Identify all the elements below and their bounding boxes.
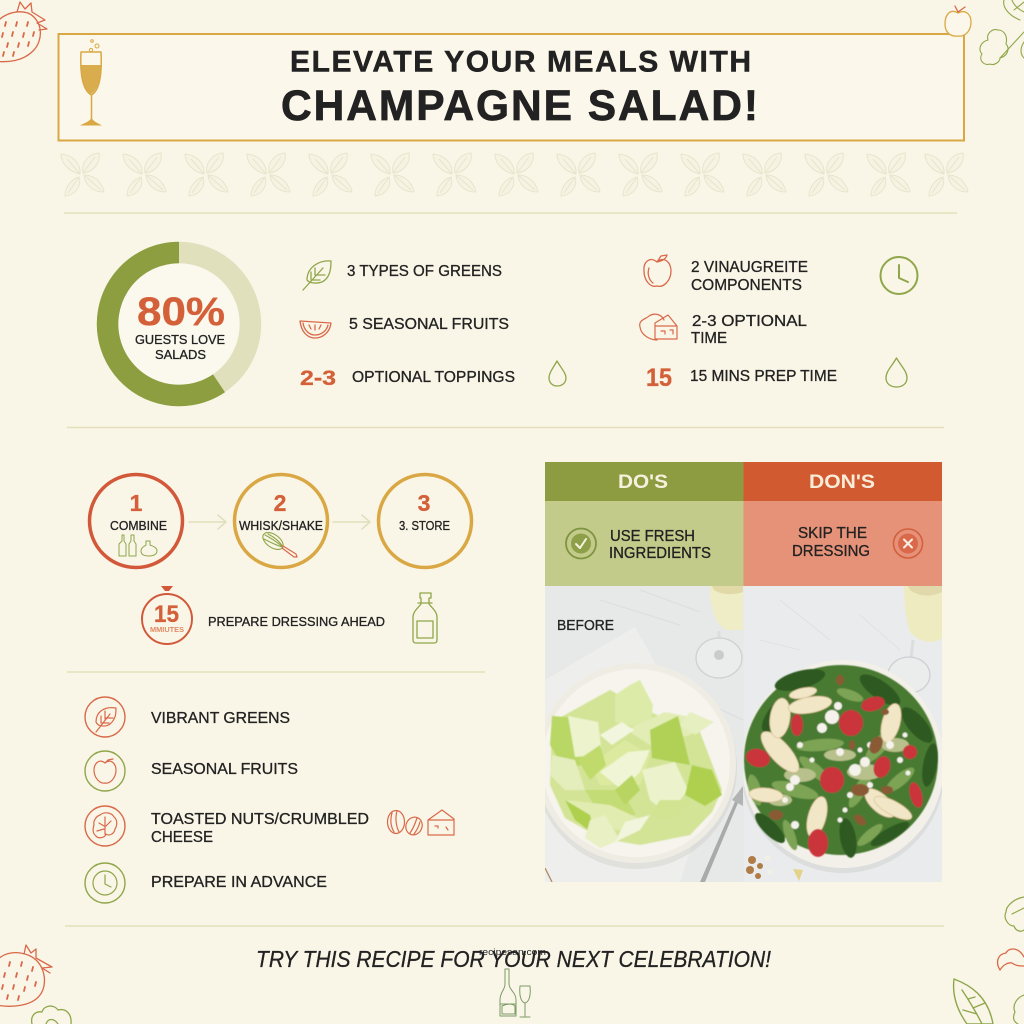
icon: champagne bottle and glass xyxy=(500,969,530,1017)
item: vibrant greens: VIBRANT GREENS xyxy=(151,710,290,727)
step 1: combine: 1 xyxy=(130,490,143,516)
donut caption xyxy=(135,332,225,362)
item: toasted nuts / crumbled cheese xyxy=(85,806,454,846)
step 1: combine xyxy=(90,474,182,568)
icon: herb top right xyxy=(980,0,1024,65)
watermark: recipesan.com xyxy=(479,947,546,958)
panel: don'ts xyxy=(744,462,942,586)
fact: 15 mins prep time: 15 xyxy=(646,364,672,392)
step 3: store: 3. STORE xyxy=(399,519,450,533)
fact: optional time: 2-3 OPTIONAL xyxy=(692,313,807,330)
icon: herb right edge xyxy=(1005,897,1024,931)
item: toasted nuts / crumbled cheese: CHEESE xyxy=(151,829,213,846)
panel: don'ts: DON'S xyxy=(809,472,875,493)
icon: check xyxy=(566,528,596,558)
fact: vinaigrette components: COMPONENTS xyxy=(691,277,802,294)
panel: do's: USE FRESH xyxy=(610,528,695,545)
panel: don'ts: SKIP THE xyxy=(798,525,867,542)
panel: do's: DO'S xyxy=(618,472,668,493)
heading line 1: ELEVATE YOUR MEALS WITH xyxy=(290,46,751,78)
step 2: whisk/shake: WHISK/SHAKE xyxy=(239,519,323,533)
donut caption: SALADS xyxy=(155,347,206,362)
step 3: store: 3 xyxy=(418,490,430,516)
fact: 3 types of greens xyxy=(303,261,502,290)
heading line 2: CHAMPAGNE SALAD! xyxy=(281,83,758,130)
photo: plain lettuce bowl (before) xyxy=(535,586,744,882)
fact: optional toppings: 2-3 xyxy=(300,367,336,390)
timer: 15 minutes xyxy=(142,586,192,644)
donut caption: GUESTS LOVE xyxy=(135,332,225,347)
process steps xyxy=(90,474,472,568)
icons: nuts and cheese xyxy=(388,810,454,838)
photo: dressed champagne salad (after) xyxy=(741,586,945,882)
fact: 15 mins prep time: 15 MINS PREP TIME xyxy=(690,368,837,385)
fact: optional toppings: OPTIONAL TOPPINGS xyxy=(352,369,515,386)
fact: 3 types of greens: 3 TYPES OF GREENS xyxy=(347,263,502,280)
fact: vinaigrette components: 2 VINAUGREITE xyxy=(691,259,808,276)
timer: 15 minutes: MMIUTES xyxy=(150,625,184,634)
checklist xyxy=(85,697,454,903)
panel: don'ts: DRESSING xyxy=(792,543,870,560)
icon: leaf bottom right xyxy=(954,979,993,1024)
panel: do's xyxy=(545,462,744,586)
icon: champagne flute xyxy=(80,40,102,126)
icon: strawberry bottom left xyxy=(0,945,52,1006)
item: vibrant greens xyxy=(85,697,290,737)
fact: optional toppings xyxy=(300,361,566,390)
fact: optional time: TIME xyxy=(691,330,727,347)
icon: nut right edge xyxy=(998,949,1024,970)
fact: 5 seasonal fruits: 5 SEASONAL FRUITS xyxy=(349,316,509,333)
arrow xyxy=(333,515,370,529)
leaf pattern band xyxy=(61,153,968,196)
step 2: whisk/shake xyxy=(234,474,328,568)
fact: 5 seasonal fruits xyxy=(300,316,509,338)
icon: apple top right xyxy=(945,6,971,36)
panel: do's: INGREDIENTS xyxy=(609,545,711,562)
title frame xyxy=(58,34,964,140)
photo label: before: BEFORE xyxy=(557,618,614,634)
arrow xyxy=(189,515,226,529)
fact: optional time xyxy=(640,313,807,347)
icon: drop xyxy=(886,358,907,387)
item: seasonal fruits: SEASONAL FRUITS xyxy=(151,761,298,778)
icon: clock xyxy=(880,257,918,294)
step 3: store xyxy=(378,474,472,568)
timer: 15 minutes: 15 xyxy=(154,601,179,628)
icon: strawberry top left xyxy=(0,2,47,62)
icon: drop xyxy=(549,361,566,386)
icon: herb bottom left xyxy=(32,1006,71,1024)
item: seasonal fruits xyxy=(85,751,298,791)
item: toasted nuts / crumbled cheese: TOASTED NUTS/CRUMBLED xyxy=(151,811,369,828)
closing line: TRY THIS RECIPE FOR YOUR NEXT CELEBRATION! xyxy=(256,946,772,972)
icon: herb bottom right xyxy=(1014,995,1024,1024)
step 1: combine: COMBINE xyxy=(110,519,167,533)
step 2: whisk/shake: 2 xyxy=(274,490,286,516)
icon: dressing bottle xyxy=(413,593,437,643)
icon: cross xyxy=(894,529,922,558)
panel: do's and don'ts comparison xyxy=(535,462,945,882)
donut chart: 80% guests love salads xyxy=(108,252,250,396)
fact: 15 mins prep time xyxy=(646,358,907,392)
stat: 80%: 80% xyxy=(137,290,225,334)
item: prepare in advance xyxy=(85,863,327,903)
fact: vinaigrette components xyxy=(644,255,918,294)
note: prepare dressing ahead: PREPARE DRESSING AHEAD xyxy=(208,614,385,629)
item: prepare in advance: PREPARE IN ADVANCE xyxy=(151,874,327,891)
